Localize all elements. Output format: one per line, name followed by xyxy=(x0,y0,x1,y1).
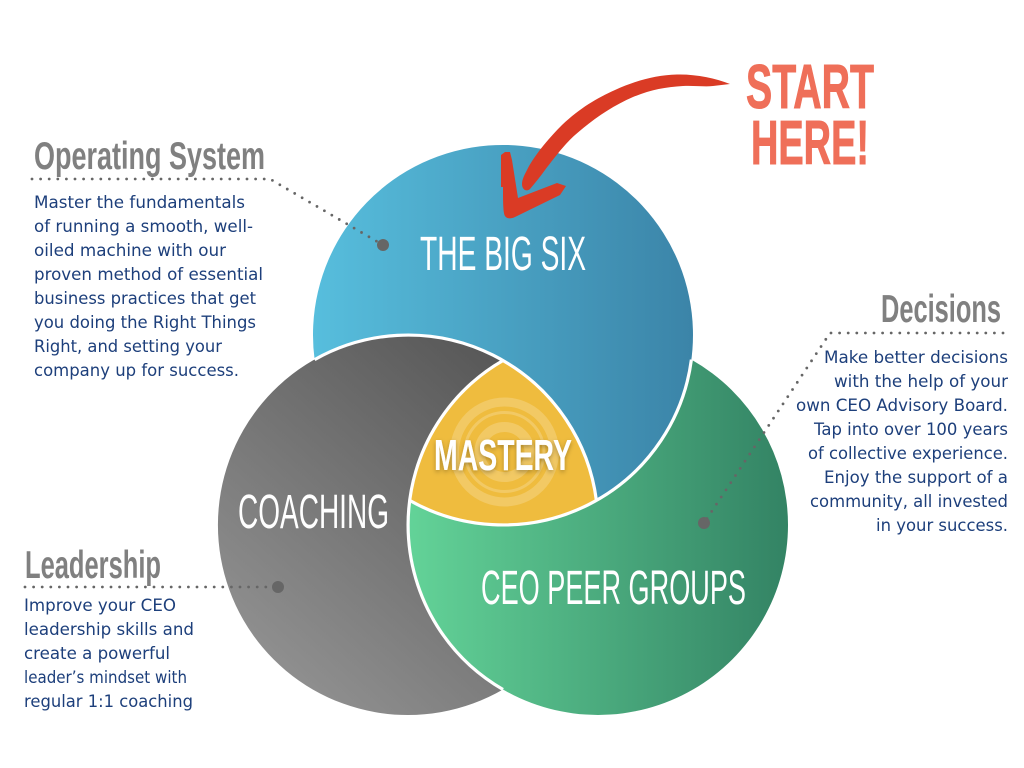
text block: Operating System description: company up for success. xyxy=(34,361,239,381)
text block: Operating System description: Right, and setting your xyxy=(34,337,222,357)
label: Coaching: COACHING xyxy=(238,486,389,539)
text block: Decisions description: of collective experience. xyxy=(808,444,1008,464)
panel: Leadership xyxy=(24,544,284,712)
circle: CEO Peer Groups xyxy=(408,360,788,715)
panel: Operating System xyxy=(32,135,389,381)
callout: Start Here: START xyxy=(746,53,874,122)
text block: Leadership description xyxy=(24,596,194,712)
label: Mastery: MASTERY xyxy=(434,431,572,480)
text block: Decisions description: Tap into over 100 years xyxy=(813,420,1008,440)
heading: Leadership: Leadership xyxy=(25,544,161,587)
text block: Leadership description: create a powerful xyxy=(24,644,170,664)
text block: Decisions description xyxy=(796,348,1008,536)
text block: Decisions description: in your success. xyxy=(876,516,1008,536)
text block: Leadership description: leader’s mindset with xyxy=(24,668,187,688)
callout: Start Here: HERE! xyxy=(751,109,869,178)
heading: Operating System: Operating System xyxy=(34,135,265,178)
text block: Operating System description: you doing the Right Things xyxy=(34,313,256,333)
leader line: Leadership xyxy=(25,586,278,588)
center: Mastery segment xyxy=(410,360,596,525)
text block: Operating System description: business practices that get xyxy=(34,289,256,309)
leader line: Decisions xyxy=(704,333,1003,523)
leader line: Operating System xyxy=(32,179,383,245)
leader dot: Operating System xyxy=(377,239,389,251)
text block: Decisions description: with the help of your xyxy=(834,372,1008,392)
circle: The Big Six xyxy=(313,145,693,500)
white separators between circles xyxy=(315,335,691,690)
panel: Decisions xyxy=(698,288,1008,536)
callout: Start Here xyxy=(746,53,874,178)
text block: Operating System description xyxy=(34,193,263,381)
text block: Decisions description: Make better decisions xyxy=(824,348,1008,368)
text block: Operating System description: of running a smooth, well- xyxy=(34,217,253,237)
text block: Operating System description: proven method of essential xyxy=(34,265,263,285)
circle: Coaching xyxy=(218,335,503,715)
text block: Leadership description: Improve your CEO xyxy=(24,596,176,616)
text block: Operating System description: Master the fundamentals xyxy=(34,193,245,213)
leader dot: Leadership xyxy=(272,581,284,593)
arrow: brush stroke pointing to The Big Six xyxy=(501,74,730,218)
text block: Decisions description: community, all invested xyxy=(810,492,1008,512)
text block: Decisions description: Enjoy the support of a xyxy=(824,468,1008,488)
text block: Decisions description: own CEO Advisory Board. xyxy=(796,396,1008,416)
label: The Big Six: THE BIG SIX xyxy=(420,228,586,281)
text block: Operating System description: oiled machine with our xyxy=(34,241,226,261)
leader dot: Decisions xyxy=(698,517,710,529)
label: CEO Peer Groups: CEO PEER GROUPS xyxy=(481,562,746,615)
text block: Leadership description: regular 1:1 coaching xyxy=(24,692,193,712)
text block: Leadership description: leadership skills and xyxy=(24,620,194,640)
